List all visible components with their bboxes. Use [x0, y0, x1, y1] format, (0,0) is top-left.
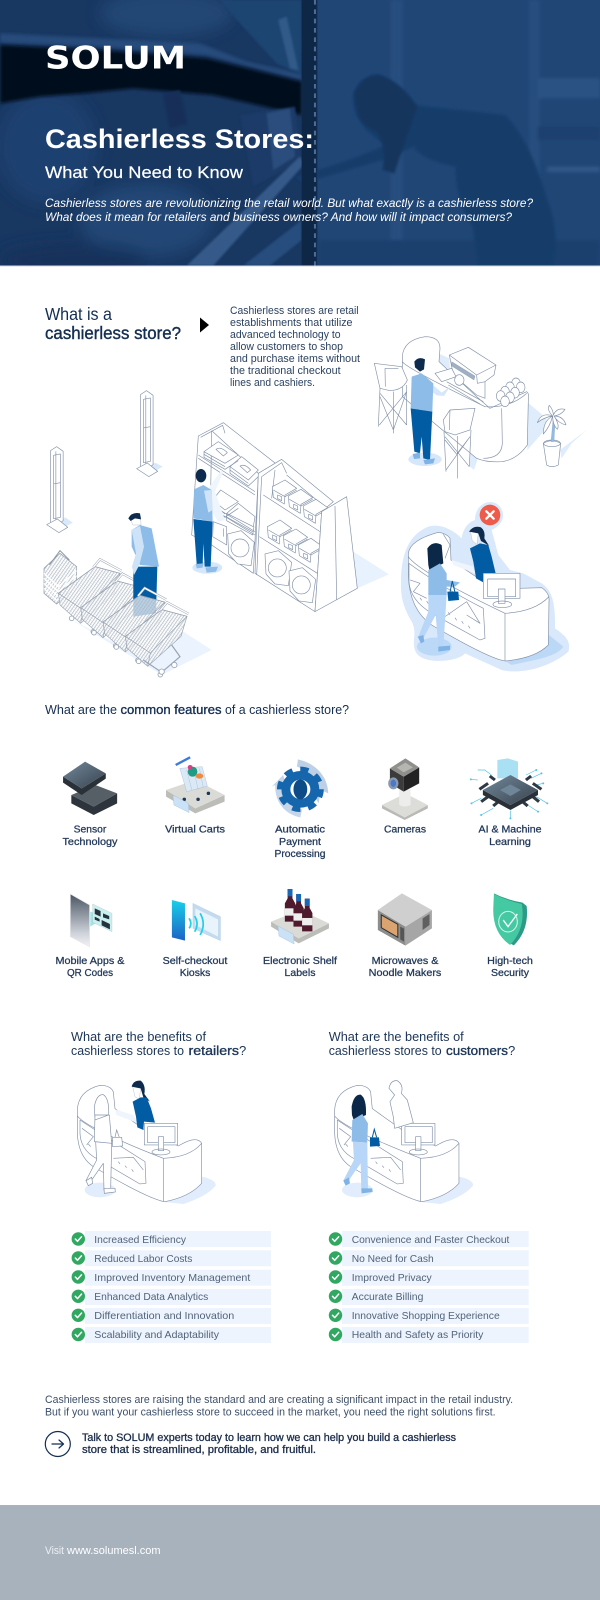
- header banner photo: [0, 0, 600, 277]
- icon: self-checkout kiosk: [172, 900, 220, 941]
- coffee machine: [435, 347, 496, 404]
- feature labels: Automatic: [275, 824, 325, 836]
- heading: common features: [45, 702, 349, 717]
- feature labels: Security: [491, 968, 530, 979]
- call to action: [82, 1432, 456, 1456]
- benefit list: customers: Accurate Billing: [352, 1292, 424, 1303]
- counter: [402, 337, 529, 462]
- benefit list: customers: Health and Safety as Priority: [352, 1330, 484, 1341]
- icon: sensor: [63, 762, 117, 815]
- illustration: cashier highlighted: [77, 1081, 216, 1204]
- closing text: But if you want your cashierless store to succeed in the market, you need the right solutions first.: [45, 1407, 496, 1419]
- feature labels: Mobile Apps &: [56, 956, 125, 967]
- icon: automatic payment gear: [272, 759, 328, 817]
- barista: [408, 358, 450, 466]
- heading: customers: What are the benefits of: [329, 1029, 464, 1044]
- heading: customers: cashierless stores to: [329, 1043, 442, 1058]
- monitor: [483, 573, 520, 608]
- definition text: advanced technology to: [230, 329, 341, 341]
- closing text: Cashierless stores are raising the standard and are creating a significant impact in the retail industry.: [45, 1394, 513, 1406]
- feature labels: Microwaves &: [372, 956, 438, 967]
- heading: customers: [329, 1029, 515, 1058]
- heading: common features: common features: [120, 702, 222, 717]
- illustration: customer highlighted: [335, 1081, 473, 1204]
- heading: what is a cashierless store: cashierless store?: [45, 323, 181, 343]
- right shelf unit: [255, 459, 333, 612]
- reception with cashier and customer: [401, 502, 569, 671]
- icon: mobile phone and QR code: [70, 894, 112, 947]
- call to action: Talk to SOLUM experts today to learn how we can help you build a cashierless: [82, 1432, 456, 1444]
- intro text: [45, 196, 533, 224]
- feature icons: [63, 757, 548, 947]
- feature labels: Learning: [489, 837, 531, 848]
- feature labels: Sensor: [74, 824, 107, 836]
- benefit list: customers: Innovative Shopping Experience: [352, 1311, 500, 1322]
- footer link: Visit: [45, 1545, 64, 1557]
- heading: what is a cashierless store: What is a: [45, 304, 112, 324]
- benefit list: customers: Improved Privacy: [352, 1273, 432, 1284]
- footer link: www.solumesl.com: [66, 1545, 161, 1557]
- heading: customers: customers: [446, 1043, 509, 1058]
- shopper at carts: [128, 513, 159, 617]
- heading: customers: ?: [508, 1043, 515, 1058]
- call to action: store that is streamlined, profitable, and fruitful.: [82, 1444, 316, 1456]
- benefit list: retailers: Enhanced Data Analytics: [94, 1292, 208, 1303]
- reception counter: [408, 532, 549, 661]
- heading: retailers: retailers: [188, 1043, 240, 1058]
- icon: microwave: [378, 893, 432, 946]
- shopping carts, baskets and shopper: [44, 513, 212, 677]
- benefit list: retailers: Scalability and Adaptability: [94, 1330, 220, 1341]
- intro text: What does it mean for retailers and business owners? And how will it impact consumers?: [45, 210, 512, 224]
- definition text: the traditional checkout: [230, 365, 341, 377]
- icon: security shield: [493, 893, 527, 945]
- feature labels: AI & Machine: [478, 824, 542, 836]
- feature labels: Processing: [274, 849, 326, 860]
- definition text: and purchase items without: [230, 353, 360, 365]
- heading: common features: What are the: [45, 702, 117, 717]
- definition text: establishments that utilize: [230, 317, 353, 329]
- benefit list: retailers: Reduced Labor Costs: [94, 1254, 192, 1265]
- store illustration: [44, 337, 587, 677]
- panel: benefits to customers: [329, 1029, 529, 1343]
- heading: common features: of a cashierless store?: [225, 702, 349, 717]
- benefit list: retailers: Increased Efficiency: [94, 1235, 187, 1246]
- feature labels: Payment: [279, 837, 321, 848]
- left stool: [374, 363, 407, 433]
- benefit list: customers: Convenience and Faster Checkout: [352, 1235, 510, 1246]
- arrow: pointer to definition: [200, 318, 209, 332]
- shelf unit and shopper: [192, 423, 389, 612]
- photo: store interior and woman at right: [295, 0, 600, 267]
- heading: retailers: cashierless stores to: [71, 1043, 184, 1058]
- benefit list: customers: No Need for Cash: [352, 1254, 434, 1265]
- heading: retailers: What are the benefits of: [71, 1029, 206, 1044]
- cups: [496, 378, 525, 407]
- intro text: Cashierless stores are revolutionizing the retail world. But what exactly is a cashierless store?: [45, 196, 533, 210]
- benefit list: customers: [329, 1231, 529, 1343]
- feature labels: High-tech: [487, 956, 533, 967]
- footer band: [0, 1505, 600, 1600]
- feature labels: Labels: [284, 968, 316, 979]
- left shelf unit: [192, 423, 288, 573]
- feature labels: Technology: [62, 837, 118, 848]
- icon: camera: [382, 758, 428, 820]
- definition text: Cashierless stores are retail: [230, 305, 359, 317]
- coffee counter with barista: [374, 337, 587, 478]
- feature labels: Virtual Carts: [165, 824, 225, 836]
- feature labels: Cameras: [384, 824, 426, 836]
- heading: retailers: [71, 1029, 246, 1058]
- subtitle: What You Need to Know: [45, 163, 244, 182]
- closing text: [45, 1394, 513, 1419]
- icon: circled arrow: [45, 1432, 70, 1456]
- definition text: [230, 305, 360, 389]
- customer: [418, 543, 460, 652]
- security gates: [47, 391, 163, 533]
- definition text: allow customers to shop: [230, 341, 343, 353]
- feature labels: Noodle Makers: [369, 968, 441, 979]
- red cross badge: [480, 505, 500, 525]
- icon: virtual cart: [166, 757, 225, 813]
- benefit list: retailers: Improved Inventory Management: [94, 1273, 250, 1284]
- icon: AI chip: [470, 758, 548, 819]
- feature labels: Electronic Shelf: [263, 956, 337, 967]
- panel: benefits to retailers: [71, 1029, 271, 1343]
- feature labels: [56, 824, 542, 979]
- plant in a pot: [537, 405, 566, 467]
- feature labels: Self-checkout: [163, 956, 227, 967]
- heading: what is a cashierless store: [45, 304, 181, 343]
- heading: retailers: ?: [239, 1043, 246, 1058]
- shopper at shelf: [192, 469, 225, 574]
- title: Cashierless Stores:: [45, 124, 314, 154]
- photo: blurred shelves at left: [0, 0, 317, 277]
- benefit list: retailers: Differentiation and Innovation: [94, 1311, 235, 1322]
- shelf end panel: [315, 497, 357, 612]
- feature labels: QR Codes: [67, 968, 113, 979]
- feature labels: Kiosks: [180, 968, 210, 979]
- logo: SOLUM: [45, 40, 186, 76]
- cashier: [452, 527, 496, 582]
- definition text: lines and cashiers.: [230, 377, 315, 389]
- icon: electronic shelf labels: [271, 889, 329, 944]
- right stool: [443, 408, 475, 478]
- benefit list: retailers: [72, 1231, 271, 1343]
